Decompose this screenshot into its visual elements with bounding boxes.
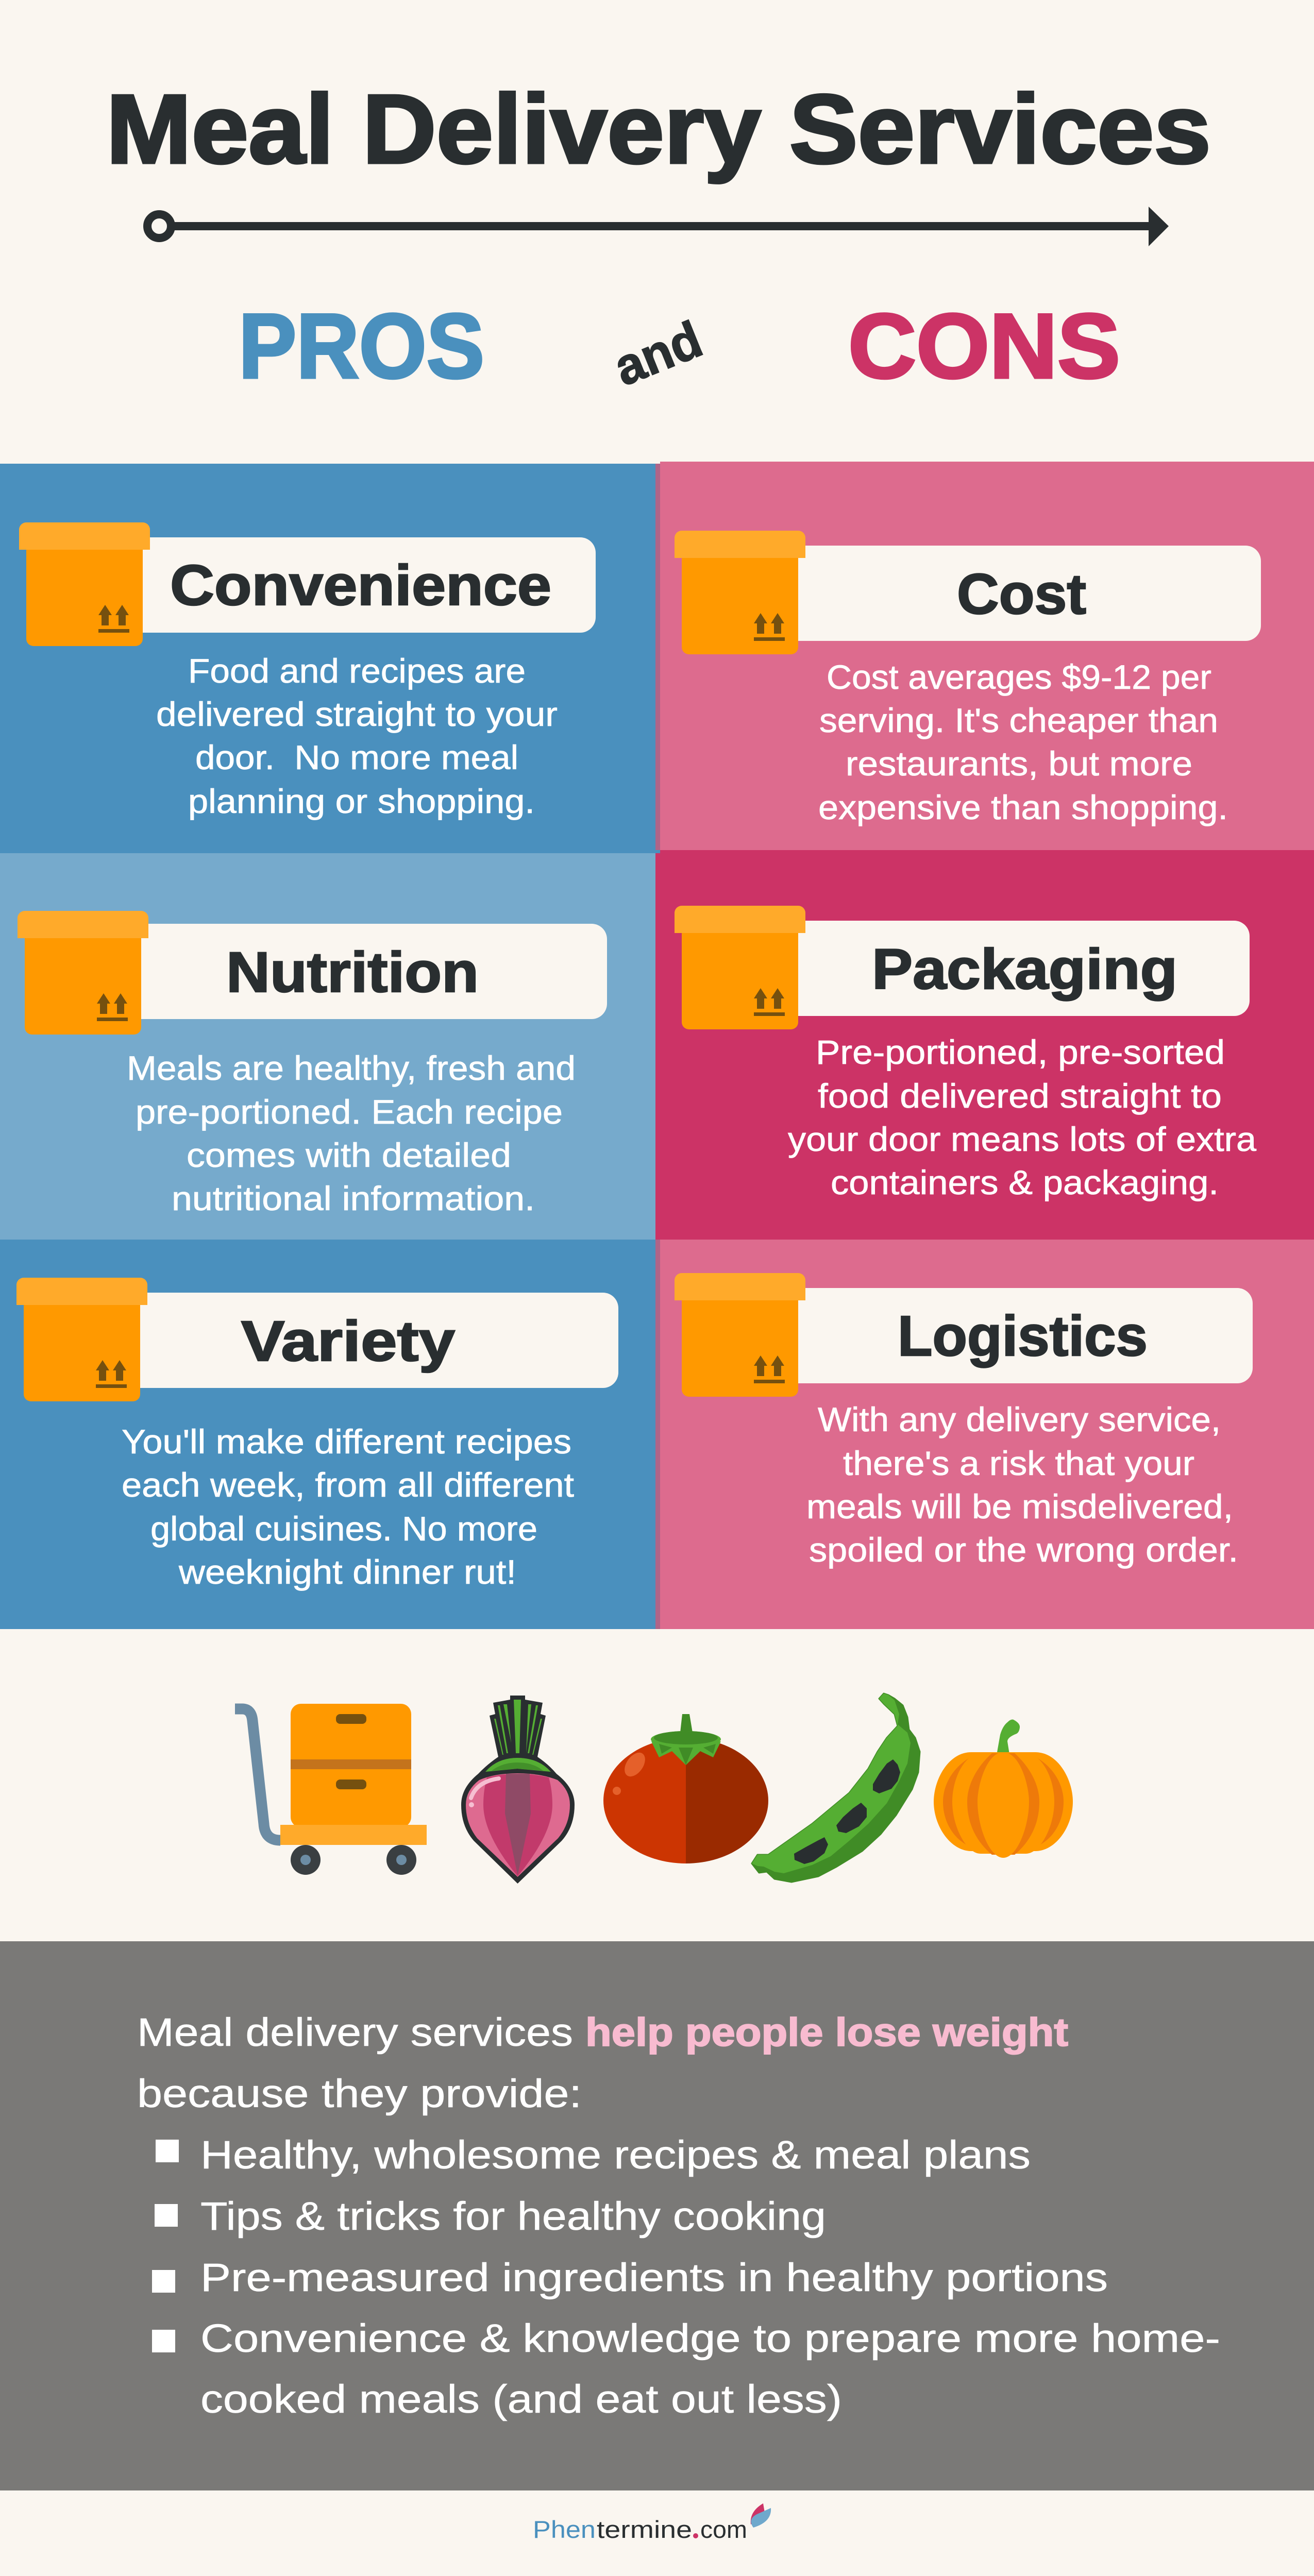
icon: box	[16, 1278, 147, 1401]
icon: pumpkin	[934, 1720, 1073, 1858]
icon: box	[675, 531, 805, 654]
text: convenience description: delivered straight to your	[156, 695, 558, 733]
icon: tomato	[603, 1714, 768, 1863]
logo: phentermine.com: termine	[597, 2516, 692, 2543]
icon: box	[19, 522, 150, 646]
heading box: packaging	[737, 921, 1250, 1016]
text: variety description	[122, 1422, 574, 1591]
text: intro	[137, 2010, 1068, 2116]
text: variety description: weeknight dinner rut!	[178, 1553, 516, 1591]
panel: cost	[660, 462, 1314, 850]
panel: weight loss benefits	[0, 1941, 1314, 2490]
text: cost description: expensive than shopping.	[818, 788, 1228, 826]
heading: cons: CONS	[848, 295, 1120, 397]
heading box: cost: Cost	[957, 563, 1086, 626]
title: Meal Delivery Services	[106, 75, 1211, 184]
bullet: healthy recipes: Healthy, wholesome recipes & meal plans	[200, 2133, 1031, 2177]
heading box: packaging: Packaging	[872, 938, 1177, 1001]
icon: beet	[461, 1696, 575, 1884]
text: logistics description: there's a risk that your	[843, 1444, 1194, 1482]
heading box: logistics: Logistics	[898, 1304, 1148, 1368]
heading box: convenience	[77, 537, 596, 633]
icon: box	[675, 906, 805, 1029]
heading box: logistics	[737, 1288, 1253, 1383]
panel: packaging	[655, 850, 1314, 1240]
text: convenience description	[156, 652, 558, 820]
text: variety description: global cuisines. No more	[150, 1510, 537, 1548]
icon: delivery cart	[235, 1704, 427, 1875]
text: logistics description: With any delivery service,	[818, 1400, 1221, 1438]
logo: phentermine.com: com	[700, 2516, 747, 2543]
text: packaging description: containers & packaging.	[831, 1163, 1219, 1201]
text: cost description: serving. It's cheaper than	[819, 701, 1218, 739]
icon: bean pod	[752, 1693, 920, 1882]
bullet: convenience and knowledge	[152, 2316, 1220, 2421]
text: convenience description: Food and recipes are	[188, 652, 526, 690]
panel: variety	[0, 1240, 660, 1629]
text: convenience description: door. No more meal	[195, 738, 518, 776]
text: nutrition description	[127, 1049, 576, 1217]
text: intro: Meal delivery services	[137, 2010, 573, 2055]
panel: convenience	[0, 464, 660, 853]
heading box: cost	[737, 546, 1261, 641]
text: packaging description: Pre-portioned, pre-sorted	[816, 1033, 1225, 1071]
text: intro: help people lose weight	[585, 2010, 1068, 2055]
text: logistics description	[806, 1400, 1238, 1569]
text: convenience description: planning or shopping.	[188, 782, 535, 820]
bullet: tips and tricks: Tips & tricks for healthy cooking	[200, 2194, 826, 2239]
panel: logistics	[660, 1240, 1314, 1629]
heading box: nutrition	[77, 924, 607, 1019]
text: nutrition description: Meals are healthy, fresh and	[127, 1049, 576, 1087]
text: nutrition description: nutritional information.	[172, 1179, 535, 1217]
bullet: convenience and knowledge: cooked meals (and eat out less)	[200, 2377, 842, 2421]
text: cost description: Cost averages $9-12 per	[827, 658, 1211, 696]
heading box: variety	[77, 1293, 618, 1388]
text: nutrition description: pre-portioned. Each recipe	[136, 1093, 563, 1131]
text: intro: because they provide:	[137, 2072, 582, 2116]
text: nutrition description: comes with detailed	[187, 1136, 511, 1174]
text: packaging description: your door means lots of extra	[788, 1120, 1256, 1158]
text: variety description: You'll make different recipes	[122, 1422, 571, 1461]
logo: phentermine.com	[533, 2503, 771, 2543]
heading box: nutrition: Nutrition	[226, 941, 479, 1004]
bullet: pre-measured ingredients: Pre-measured ingredients in healthy portions	[200, 2256, 1108, 2300]
heading box: convenience: Convenience	[170, 554, 551, 617]
heading: and: and	[606, 310, 710, 397]
bullet: convenience and knowledge: Convenience & knowledge to prepare more home-	[200, 2316, 1220, 2361]
text: cost description: restaurants, but more	[846, 744, 1192, 783]
text: logistics description: spoiled or the wrong order.	[809, 1531, 1238, 1569]
heading box: variety: Variety	[241, 1310, 455, 1373]
text: packaging description: food delivered straight to	[818, 1077, 1222, 1115]
heading: pros: PROS	[239, 295, 484, 397]
text: cost description	[818, 658, 1228, 826]
text: logistics description: meals will be misdelivered,	[806, 1487, 1233, 1526]
logo: phentermine.com: Phen	[533, 2516, 596, 2543]
panel: nutrition	[0, 853, 655, 1240]
icon: box	[675, 1273, 805, 1397]
text: variety description: each week, from all different	[122, 1466, 574, 1504]
arrow: title underline	[147, 207, 1169, 246]
text: packaging description	[788, 1033, 1256, 1201]
icon: box	[18, 911, 148, 1035]
